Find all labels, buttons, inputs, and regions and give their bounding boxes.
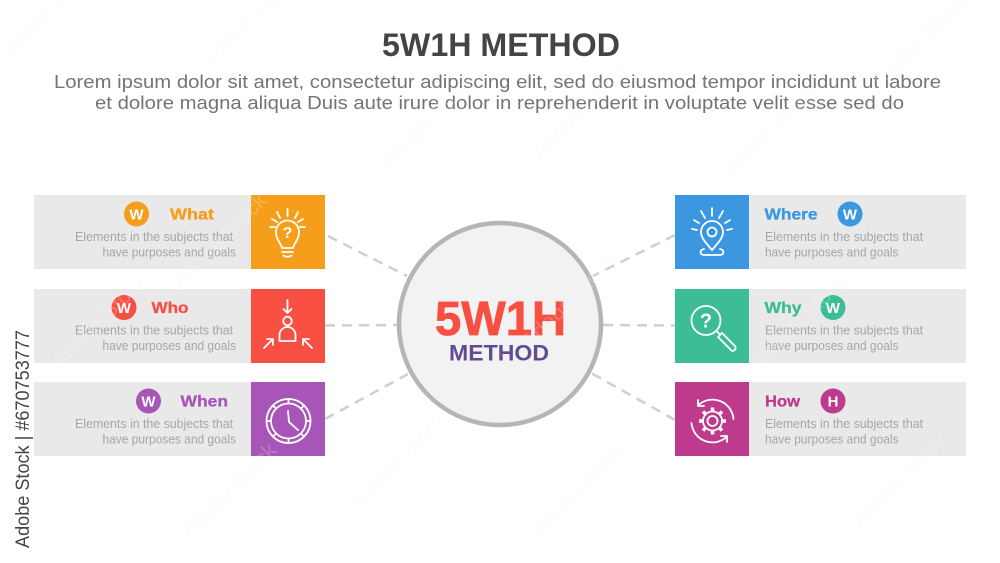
description: who — [75, 322, 236, 353]
heading: when: When — [180, 394, 228, 410]
watermark: Adobe Stock — [526, 437, 632, 544]
description: why: Elements in the subjects that — [765, 322, 923, 338]
stock credit: Adobe Stock | #670753777 — [13, 330, 34, 548]
subtitle text: et dolore magna aliqua Duis aute irure dolor in reprehenderit in voluptate velit esse sed do — [95, 93, 904, 113]
description: who: Elements in the subjects that — [75, 322, 233, 338]
badge: what: W — [129, 206, 144, 224]
panel: what — [34, 195, 325, 269]
icon: light bulb — [270, 209, 305, 257]
heading: how: How — [765, 394, 801, 410]
circle subheading: METHOD — [449, 340, 549, 366]
watermark: Adobe Stock — [166, 187, 272, 294]
heading: where: Where — [764, 206, 818, 224]
watermark: Adobe Stock — [716, 77, 822, 184]
badge: where — [838, 202, 862, 226]
description: where: have purposes and goals — [765, 244, 899, 260]
icon: location pin — [692, 208, 732, 255]
badge: how — [820, 388, 846, 414]
circle heading: 5W1H — [435, 293, 566, 346]
panel: where — [675, 195, 966, 269]
badge: what — [124, 202, 149, 226]
watermark: Adobe Stock — [46, 267, 152, 374]
icon: magnifier with question mark: ? — [700, 310, 712, 332]
icon: light bulb: ? — [283, 225, 292, 242]
watermark: Adobe Stock — [846, 427, 952, 534]
description: what: Elements in the subjects that — [75, 229, 233, 244]
description: when: Elements in the subjects that — [75, 416, 233, 431]
icon: person with arrows — [264, 300, 312, 348]
watermark: Adobe Stock — [516, 247, 622, 354]
badge: who: W — [117, 300, 132, 317]
badge: why — [820, 295, 846, 320]
badge: when: W — [141, 394, 156, 410]
description: why: have purposes and goals — [765, 338, 899, 353]
watermark: Adobe Stock — [376, 67, 482, 174]
subtitle text: Lorem ipsum dolor sit amet, consectetur adipiscing elit, sed do eiusmod tempor incididunt ut labore — [54, 72, 941, 92]
description: why — [765, 322, 923, 353]
description: when — [75, 416, 236, 446]
description: what: have purposes and goals — [102, 244, 236, 260]
description: who: have purposes and goals — [102, 338, 236, 353]
panel: who — [34, 289, 325, 363]
description: where: Elements in the subjects that — [765, 229, 923, 244]
icon: magnifier with question mark — [692, 306, 736, 351]
description: where — [765, 229, 923, 260]
description: how: have purposes and goals — [765, 432, 899, 446]
badge: when — [136, 388, 161, 414]
central circle — [399, 223, 601, 425]
heading: what: What — [170, 206, 215, 224]
description: how — [765, 416, 923, 446]
heading: who: Who — [152, 300, 189, 317]
watermark: Adobe Stock — [176, 437, 282, 544]
dashed connectors — [325, 235, 675, 420]
badge: who — [112, 295, 136, 320]
panel: why — [675, 289, 966, 363]
badge: where: W — [843, 206, 858, 224]
badge: how: H — [828, 394, 838, 410]
icon: clock — [266, 399, 310, 443]
description: when: have purposes and goals — [102, 432, 236, 446]
panel: how — [675, 382, 966, 456]
title: 5W1H METHOD — [382, 27, 620, 63]
description: what — [75, 229, 236, 260]
icon: gear with circular arrows — [692, 400, 734, 442]
panel: when — [34, 382, 325, 456]
description: how: Elements in the subjects that — [765, 416, 923, 431]
watermark: Adobe Stock — [346, 407, 452, 514]
watermark: Adobe Stock — [746, 267, 852, 374]
badge: why: W — [826, 300, 841, 317]
heading: why: Why — [764, 300, 802, 317]
watermark: Adobe Stock — [526, 57, 632, 164]
subtitle text — [54, 72, 941, 113]
